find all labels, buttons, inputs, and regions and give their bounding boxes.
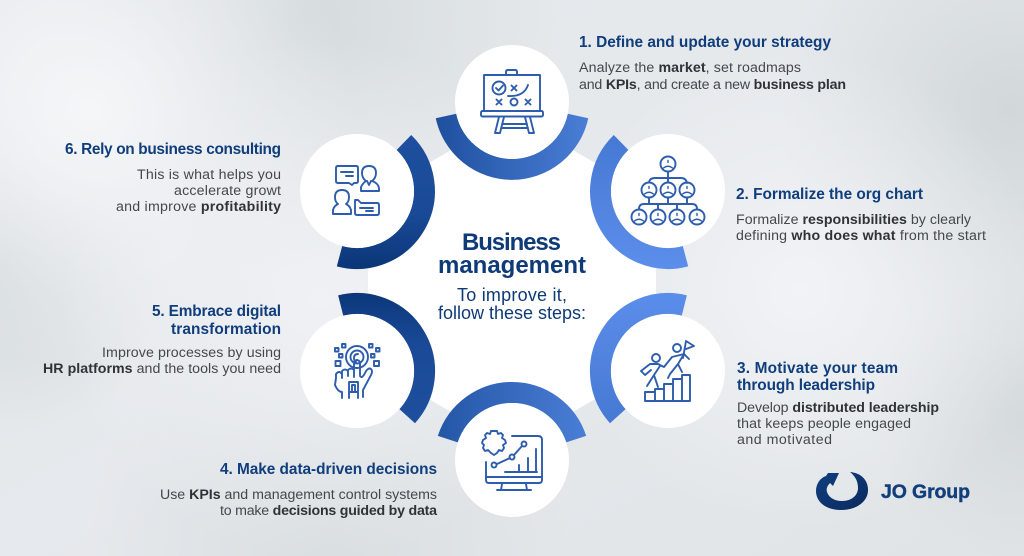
step 4 text: to make decisions guided by data [220, 503, 437, 519]
icon: team climbing stairs with flag [641, 341, 694, 401]
step 3 text: through leadership [737, 377, 875, 394]
step 5 text: HR platforms and the tools you need [43, 361, 281, 377]
arc: step 2 [601, 142, 686, 258]
step 5 text: Improve processes by using [102, 345, 281, 361]
step 3 text: Develop distributed leadership [737, 400, 939, 416]
step 6 text: and improve profitability [116, 199, 281, 215]
step 4 text: Use KPIs and management control systems [160, 487, 437, 503]
white circles [300, 45, 725, 517]
step 3 text: 3. Motivate your team [737, 360, 898, 377]
step 3 text [737, 360, 939, 448]
step 1 text: Analyze the market, set roadmaps [579, 60, 801, 76]
arc: step 3 [600, 303, 684, 416]
logo: JO Group: JO Group [881, 481, 970, 503]
arc: step 5 [341, 303, 425, 416]
logo: JO Group [816, 472, 970, 510]
center heading: To improve it, [457, 285, 567, 305]
step 6 text: accelerate growt [174, 183, 281, 199]
icon: hand touching digital target [335, 344, 380, 398]
step 1 text: and KPIs, and create a new business plan [579, 77, 846, 93]
arc: step 1 [446, 116, 578, 169]
icon: org chart [632, 156, 704, 224]
step 5 text: transformation [171, 321, 281, 338]
step 6 text [65, 141, 281, 215]
step 5 text [43, 303, 281, 377]
step 4 text [160, 461, 437, 519]
step 1 text: 1. Define and update your strategy [579, 34, 831, 51]
center heading: Business [462, 229, 561, 256]
icon: strategy easel board [481, 70, 543, 133]
step 2 text [736, 186, 986, 244]
ring arcs around the step circles [340, 116, 686, 439]
step 3 text: and motivated [737, 432, 832, 448]
step 1 text [579, 34, 846, 93]
step 4 text: 4. Make data-driven decisions [220, 461, 437, 478]
center heading [438, 229, 586, 323]
step 5 text: 5. Embrace digital [152, 303, 281, 320]
arc: step 4 [448, 392, 576, 439]
step 2 text: 2. Formalize the org chart [736, 186, 923, 203]
step 2 text: Formalize responsibilities by clearly [736, 212, 972, 228]
icon: consulting conversation [333, 166, 379, 215]
step 6 text: This is what helps you [137, 167, 281, 183]
step 3 text: that keeps people engaged [737, 416, 911, 432]
central white hexagon [368, 115, 656, 447]
arc: step 6 [340, 142, 424, 258]
step 6 text: 6. Rely on business consulting [65, 141, 281, 158]
step 2 text: defining who does what from the start [736, 228, 986, 244]
icon: monitor with gear and chart [482, 431, 542, 490]
center heading: management [438, 252, 586, 279]
center heading: follow these steps: [438, 303, 586, 323]
